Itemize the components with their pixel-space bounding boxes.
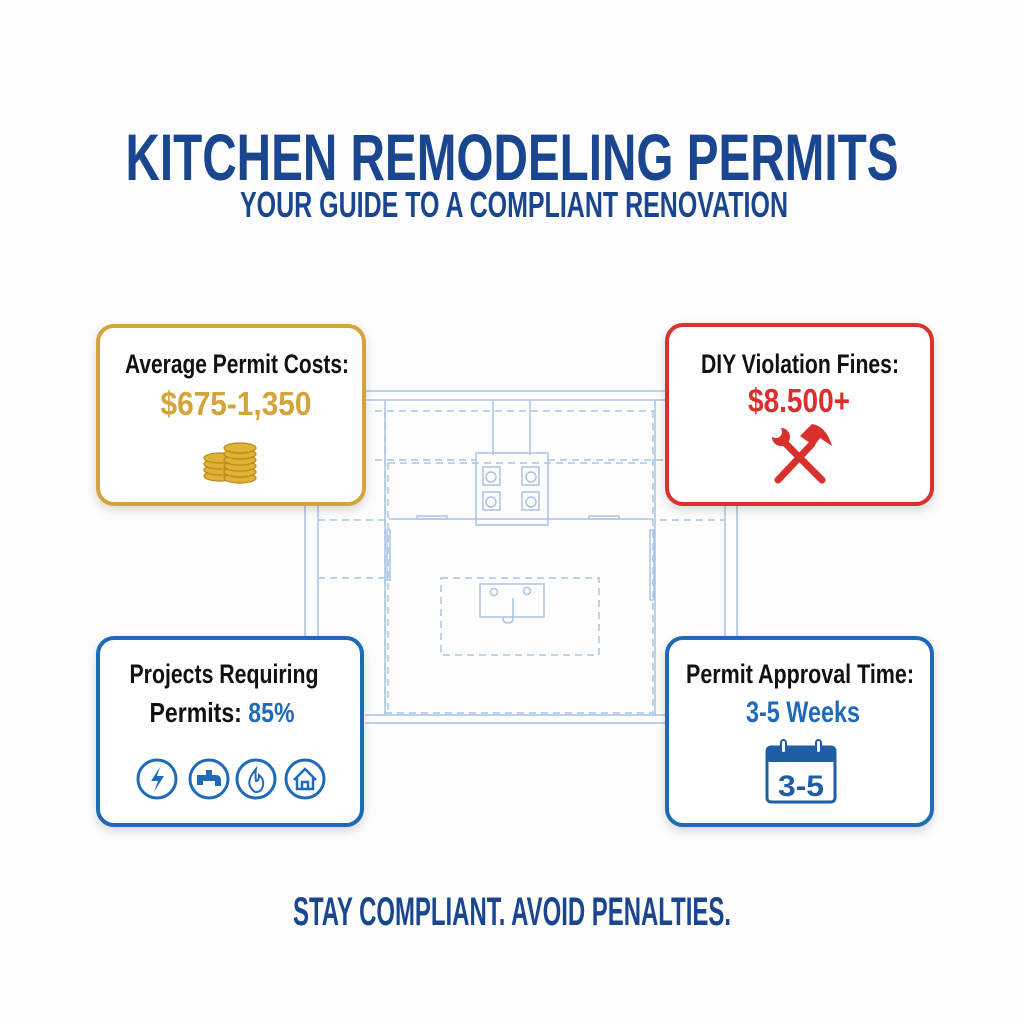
value: cost: $675-1,350 bbox=[160, 385, 312, 422]
subtitle: YOUR GUIDE TO A COMPLIANT RENOVATION bbox=[240, 184, 788, 225]
icon: coins bbox=[204, 443, 256, 483]
icon: wrench and hammer bbox=[770, 424, 832, 480]
panel: permit approval time bbox=[667, 638, 932, 825]
panel: average permit costs bbox=[98, 326, 364, 504]
value: permits 85%: Permits: 85% bbox=[150, 697, 295, 728]
icon: calendar: 3-5 bbox=[778, 770, 824, 803]
heading: average permit costs: Average Permit Costs: bbox=[125, 349, 349, 379]
panel: DIY violation fines bbox=[667, 325, 932, 504]
heading: permit approval time: Permit Approval Time: bbox=[686, 659, 914, 689]
heading: projects requiring: Projects Requiring bbox=[130, 659, 318, 689]
heading: DIY violation fines: DIY Violation Fines: bbox=[701, 349, 899, 379]
value: fines: $8.500+ bbox=[748, 382, 850, 419]
footer tagline: STAY COMPLIANT. AVOID PENALTIES. bbox=[293, 890, 731, 934]
value: 3-5 weeks: 3-5 Weeks bbox=[746, 696, 860, 729]
kitchen floor plan bbox=[305, 391, 737, 723]
panel: projects requiring permits bbox=[98, 638, 362, 825]
icon: calendar bbox=[767, 740, 835, 803]
icons: trades bbox=[138, 760, 324, 798]
